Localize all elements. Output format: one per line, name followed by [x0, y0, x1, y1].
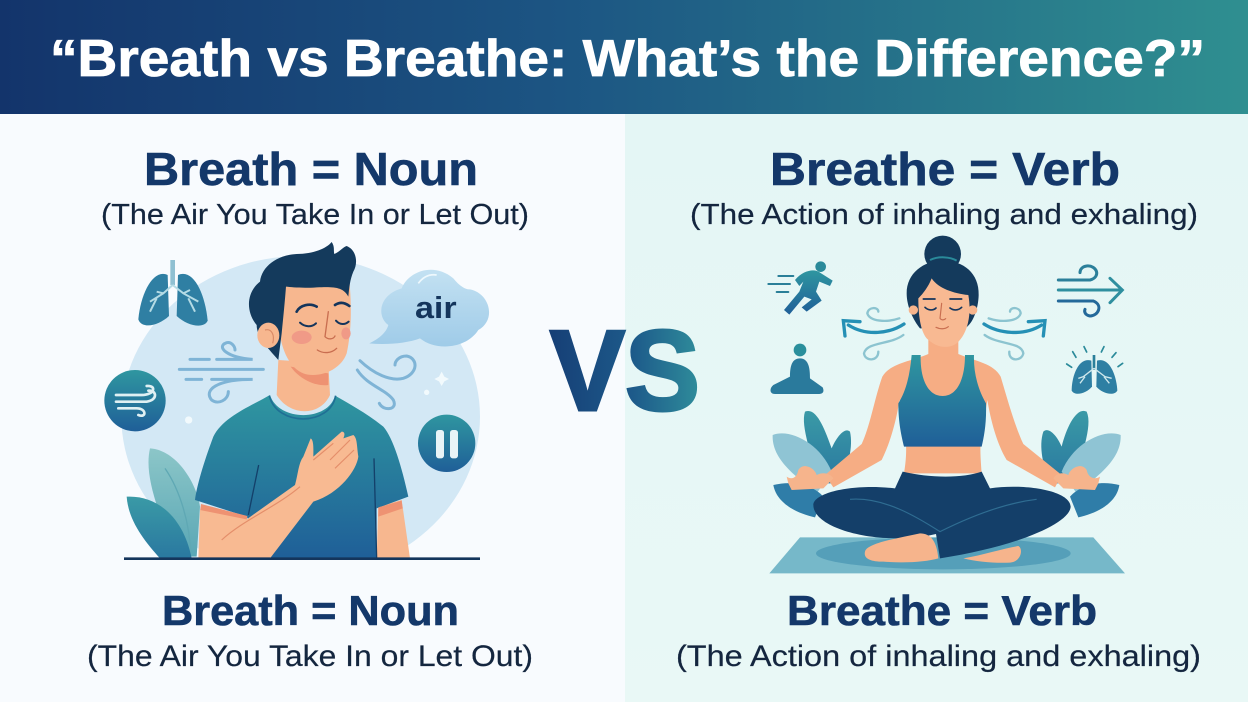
feet: [865, 533, 938, 562]
sleeve cuffs: [200, 504, 247, 520]
torso and arms: [825, 337, 1062, 487]
heading: breathe verb: Breathe = Verb: [770, 143, 1120, 195]
hair back: [907, 261, 979, 328]
left plants: [773, 411, 851, 517]
icon: lungs: [138, 260, 208, 326]
face: [918, 278, 970, 347]
illustration: man breathing: [104, 242, 489, 577]
word: air: air: [415, 291, 457, 325]
icon: wind arrow: [1058, 266, 1122, 316]
t-shirt: [195, 395, 408, 558]
man figure: [195, 242, 410, 558]
panel: left background: [0, 114, 625, 702]
ear: [257, 323, 279, 348]
woman figure: [787, 236, 1100, 563]
face: [280, 280, 351, 375]
right arm: [377, 500, 410, 558]
sports bra: [898, 355, 986, 447]
text: breathe definition repeat: (The Action of inhaling and exhaling): [676, 640, 1201, 673]
breath swirls right: [984, 308, 1045, 359]
icon: glowing lungs: [1067, 347, 1123, 394]
neck: [277, 360, 330, 411]
hands: [787, 466, 833, 490]
text: breathe definition: (The Action of inhaling and exhaling): [690, 199, 1198, 231]
ground line: [124, 555, 480, 563]
title: “Breath vs Breathe: What’s the Difference?”: [50, 30, 1205, 88]
icon: pause badge: [418, 415, 475, 472]
hair: [249, 242, 356, 360]
heading: breath noun repeat: Breath = Noun: [162, 587, 459, 634]
heading: breath noun: Breath = Noun: [144, 143, 478, 195]
yoga mat: [769, 537, 1125, 573]
nose and mouth: [317, 312, 337, 353]
wind swirl right: [357, 356, 415, 409]
panel: right background: [625, 114, 1248, 702]
left arm and hand: [198, 432, 358, 558]
VS label: VS: [550, 308, 700, 435]
plant leaves: [127, 448, 200, 558]
text: breath definition: (The Air You Take In or Let Out): [101, 199, 529, 231]
right plants: [1041, 411, 1121, 517]
icon: runner: [768, 261, 833, 315]
hair bun: [924, 236, 961, 272]
icon: meditation: [771, 344, 823, 394]
icon: wind badge: [104, 370, 166, 431]
cheeks: [292, 331, 312, 344]
sparkles: [185, 372, 449, 424]
speech cloud: air: [369, 270, 489, 346]
breath swirls left: [843, 308, 904, 359]
leggings: [813, 472, 1071, 558]
illustration: woman meditating: [768, 236, 1125, 573]
heading: breathe verb repeat: Breathe = Verb: [787, 587, 1097, 634]
eyes and brows: [297, 303, 349, 326]
ears: [909, 305, 977, 315]
face details: [923, 299, 962, 329]
background circle: [121, 256, 480, 577]
text: breath definition repeat: (The Air You Take In or Let Out): [87, 640, 533, 673]
wind swirl left: [179, 343, 263, 402]
header banner: [0, 0, 1248, 114]
